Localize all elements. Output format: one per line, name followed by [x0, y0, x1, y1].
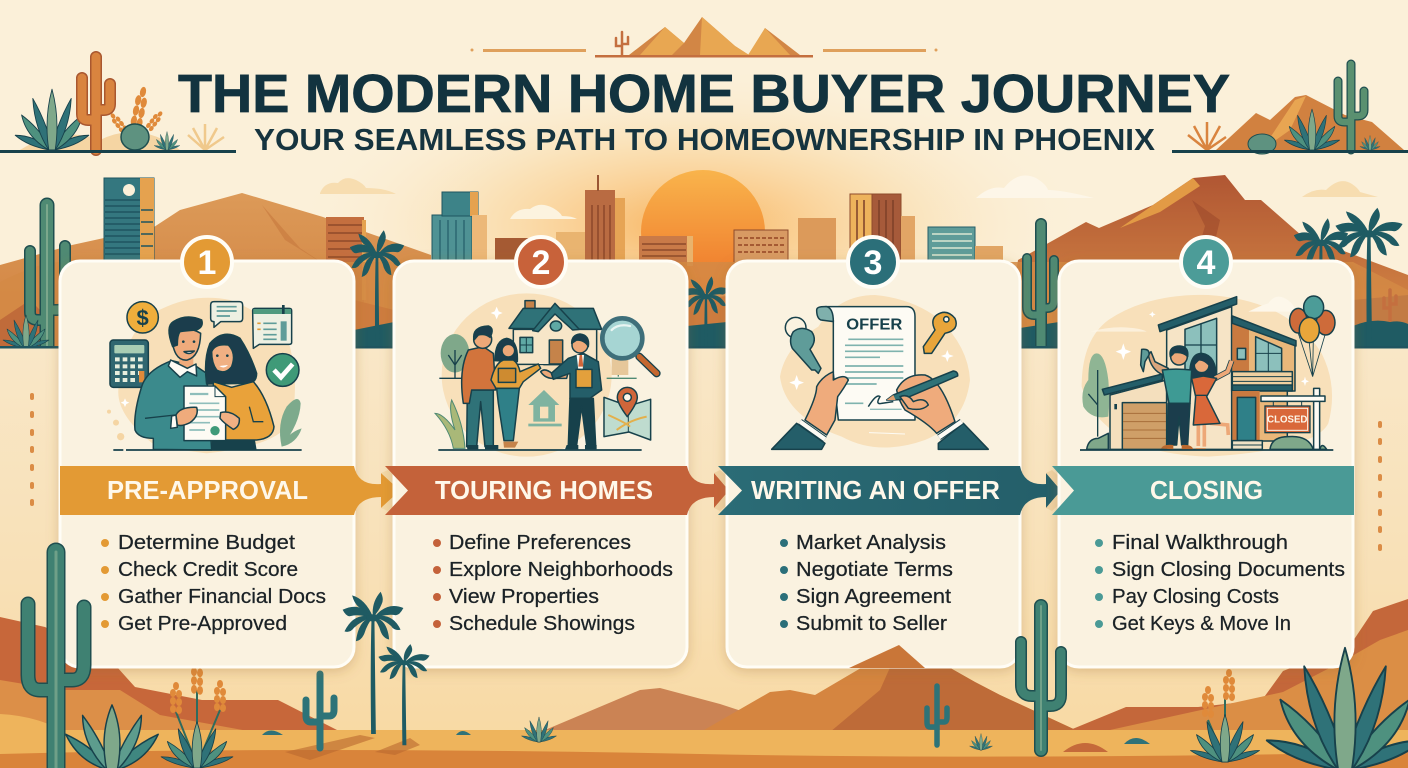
subtitle: YOUR SEAMLESS PATH TO HOMEOWNERSHIP IN PHOENIX [254, 122, 1155, 157]
bullet list: writing an offer: Submit to Seller [796, 612, 947, 635]
cloud centre [510, 205, 577, 219]
title: THE MODERN HOME BUYER JOURNEY [178, 64, 1230, 124]
banner: closing [1052, 466, 1354, 515]
mountain peak overlapping card 3 [849, 645, 925, 668]
dark horizon bushes [354, 316, 1408, 347]
sand foreground [0, 750, 1408, 768]
header decoration: centre mountains [470, 17, 938, 58]
cactus shadows [285, 735, 420, 760]
bullet list: closing [1095, 531, 1345, 635]
number badge 2 [516, 237, 566, 287]
illustration: signing the offer: OFFER [846, 316, 903, 333]
saguaro right back [1027, 224, 1054, 350]
panel: step 3 writing an offer [718, 237, 1074, 667]
number badge 4: 4 [1197, 244, 1216, 282]
number badge 3: 3 [864, 244, 882, 282]
illustration: signing the offer [772, 295, 988, 449]
banner: pre-approval: PRE-APPROVAL [107, 475, 308, 505]
small mound shapes [262, 730, 1150, 744]
banner: touring homes [385, 466, 742, 515]
small agave right [970, 734, 992, 750]
left mountain [0, 193, 431, 347]
bullet list: closing: Get Keys & Move In [1112, 612, 1291, 635]
header decoration: right desert plants [1172, 64, 1408, 154]
decorative dots left [30, 393, 34, 506]
banner: touring homes: TOURING HOMES [435, 475, 653, 505]
foreground desert landscape [0, 599, 1408, 768]
saguaro between cards 3 and 4 [1021, 606, 1061, 750]
large agave foreground right [1267, 648, 1408, 768]
buildings [104, 175, 1003, 307]
bullet list: writing an offer: Sign Agreement [796, 585, 951, 608]
banner: closing: CLOSING [1150, 475, 1263, 505]
desert skyline backdrop [0, 170, 1408, 387]
foreground plants overlapping cards [28, 552, 1408, 768]
bullet list: closing: Final Walkthrough [1112, 531, 1288, 554]
bullet list: touring homes [433, 531, 673, 635]
card 3 background [727, 261, 1020, 667]
horizon agave [3, 315, 49, 348]
illustration: touring a house [435, 293, 657, 457]
lower background panel [0, 348, 1408, 768]
card 4 background [1059, 261, 1353, 667]
saguaro left back [30, 205, 65, 350]
mid-ground hills [0, 262, 1408, 347]
sun [641, 170, 765, 294]
illustration: couple with finances: $ [137, 305, 149, 330]
bullet list: closing: Sign Closing Documents [1112, 558, 1345, 581]
illustration: couple with finances [107, 298, 302, 453]
small cactus centre right [927, 686, 947, 745]
bullet list: pre-approval: Gather Financial Docs [118, 585, 326, 608]
cloud right [976, 176, 1094, 198]
number badge 3 [848, 237, 898, 287]
bullet list: writing an offer [780, 531, 953, 635]
yucca right [1190, 669, 1260, 762]
banner: writing an offer [718, 466, 1074, 515]
decorative dots right [1378, 421, 1382, 551]
small agave centre [522, 717, 556, 742]
bullet list: touring homes: Define Preferences [449, 531, 631, 554]
number badge 2: 2 [532, 244, 550, 282]
panel: step 4 closing [1052, 237, 1354, 667]
right red hills [1070, 599, 1408, 740]
bullet list: touring homes: View Properties [449, 585, 599, 608]
left red hills [0, 617, 337, 740]
small desert cactus far right [1384, 290, 1396, 320]
card 1 background [60, 261, 354, 667]
cloud left [320, 178, 396, 194]
bullet list: touring homes: Explore Neighborhoods [449, 558, 673, 581]
yucca left [161, 660, 233, 768]
palm behind card 1 [350, 230, 404, 364]
number badge 4 [1181, 237, 1231, 287]
panel: step 2 touring homes [385, 237, 742, 667]
palm far right large [1335, 208, 1403, 350]
bullet list: pre-approval: Get Pre-Approved [118, 612, 287, 635]
bullet list: pre-approval [101, 531, 326, 635]
banner: pre-approval [60, 466, 409, 515]
centre muted hill [545, 688, 800, 730]
header decoration: left desert plants [0, 57, 236, 153]
bullet list: writing an offer: Negotiate Terms [796, 558, 953, 581]
saguaro overlapping card 1 [28, 552, 84, 768]
centre mountain [704, 645, 1080, 732]
agave foreground left [66, 705, 158, 768]
bullet list: pre-approval: Determine Budget [118, 531, 295, 554]
illustration: new home with closed sign: CLOSED [1267, 415, 1307, 426]
number badge 1 [182, 237, 232, 287]
bullet list: touring homes: Schedule Showings [449, 612, 635, 635]
sunset glow [290, 65, 1090, 385]
bullet list: pre-approval: Check Credit Score [118, 558, 298, 581]
right mountain [1005, 175, 1408, 347]
small cactus centre left [306, 674, 334, 748]
bullet list: closing: Pay Closing Costs [1112, 585, 1279, 608]
palm far right small [1294, 218, 1348, 352]
horizon line [0, 346, 1408, 348]
card 2 background [394, 261, 687, 667]
large palm overlapping card 2 [343, 592, 403, 734]
number badge 1: 1 [198, 244, 216, 282]
panel: step 1 pre-approval [60, 237, 409, 667]
palm behind card 2 [684, 276, 728, 387]
sand band [0, 730, 1408, 768]
small palm overlapping card 2 [378, 644, 430, 745]
banner: writing an offer: WRITING AN OFFER [751, 475, 1000, 505]
cloud far right [1302, 181, 1378, 197]
bullet list: writing an offer: Market Analysis [796, 531, 946, 554]
illustration: new home with closed sign [1080, 295, 1335, 457]
